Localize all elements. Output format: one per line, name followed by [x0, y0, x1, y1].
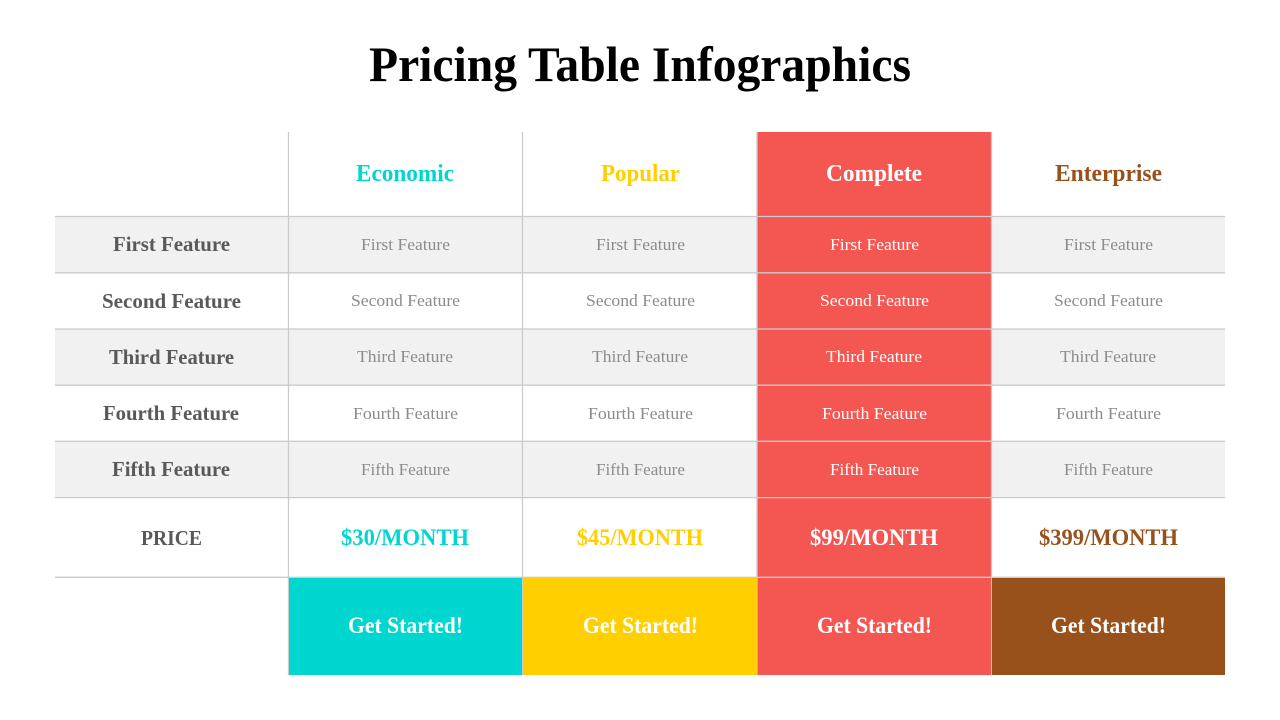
column headers: Popular	[601, 161, 680, 187]
column headers	[356, 161, 1162, 187]
row labels: Second Feature	[102, 289, 241, 313]
button: enterprise	[992, 578, 1225, 675]
economic features	[351, 235, 460, 479]
button: complete: Get Started!	[817, 613, 932, 638]
complete features: Fourth Feature	[822, 404, 927, 423]
enterprise features: Fourth Feature	[1056, 404, 1161, 423]
column headers: Economic	[356, 161, 454, 187]
button: popular	[523, 578, 757, 675]
enterprise features	[1054, 235, 1163, 479]
button: complete	[758, 578, 991, 675]
complete features: Fifth Feature	[830, 460, 919, 479]
row labels	[102, 232, 241, 550]
button: economic: Get Started!	[348, 613, 463, 638]
button: enterprise: Get Started!	[1051, 613, 1166, 638]
economic features: First Feature	[361, 235, 450, 254]
column headers: Complete	[826, 161, 922, 187]
enterprise features: First Feature	[1064, 235, 1153, 254]
panel: complete column highlight	[757, 132, 992, 675]
grid lines	[55, 132, 1225, 675]
button: economic	[289, 578, 522, 675]
popular features: Second Feature	[586, 291, 695, 310]
title: Pricing Table Infographics	[369, 36, 911, 92]
row labels: Third Feature	[109, 345, 234, 369]
complete features: First Feature	[830, 235, 919, 254]
enterprise features: Fifth Feature	[1064, 460, 1153, 479]
prices	[341, 525, 1178, 551]
economic features: Third Feature	[357, 347, 453, 366]
enterprise features: Third Feature	[1060, 347, 1156, 366]
popular features: First Feature	[596, 235, 685, 254]
column headers: Enterprise	[1055, 161, 1162, 187]
prices: $399/MONTH	[1039, 525, 1178, 551]
economic features: Fifth Feature	[361, 460, 450, 479]
row labels: Fifth Feature	[112, 457, 230, 481]
row stripes	[55, 217, 1225, 498]
economic features: Second Feature	[351, 291, 460, 310]
popular features	[586, 235, 695, 479]
button: popular: Get Started!	[583, 613, 698, 638]
prices: $45/MONTH	[577, 525, 703, 551]
row labels: First Feature	[113, 232, 230, 256]
row labels: Fourth Feature	[103, 401, 239, 425]
economic features: Fourth Feature	[353, 404, 458, 423]
complete features: Second Feature	[820, 291, 929, 310]
popular features: Third Feature	[592, 347, 688, 366]
popular features: Fifth Feature	[596, 460, 685, 479]
popular features: Fourth Feature	[588, 404, 693, 423]
row labels: PRICE	[141, 526, 202, 550]
pricing table	[55, 132, 1225, 675]
complete features	[820, 235, 929, 479]
complete features: Third Feature	[826, 347, 922, 366]
prices: $30/MONTH	[341, 525, 469, 551]
prices: $99/MONTH	[810, 525, 938, 551]
enterprise features: Second Feature	[1054, 291, 1163, 310]
